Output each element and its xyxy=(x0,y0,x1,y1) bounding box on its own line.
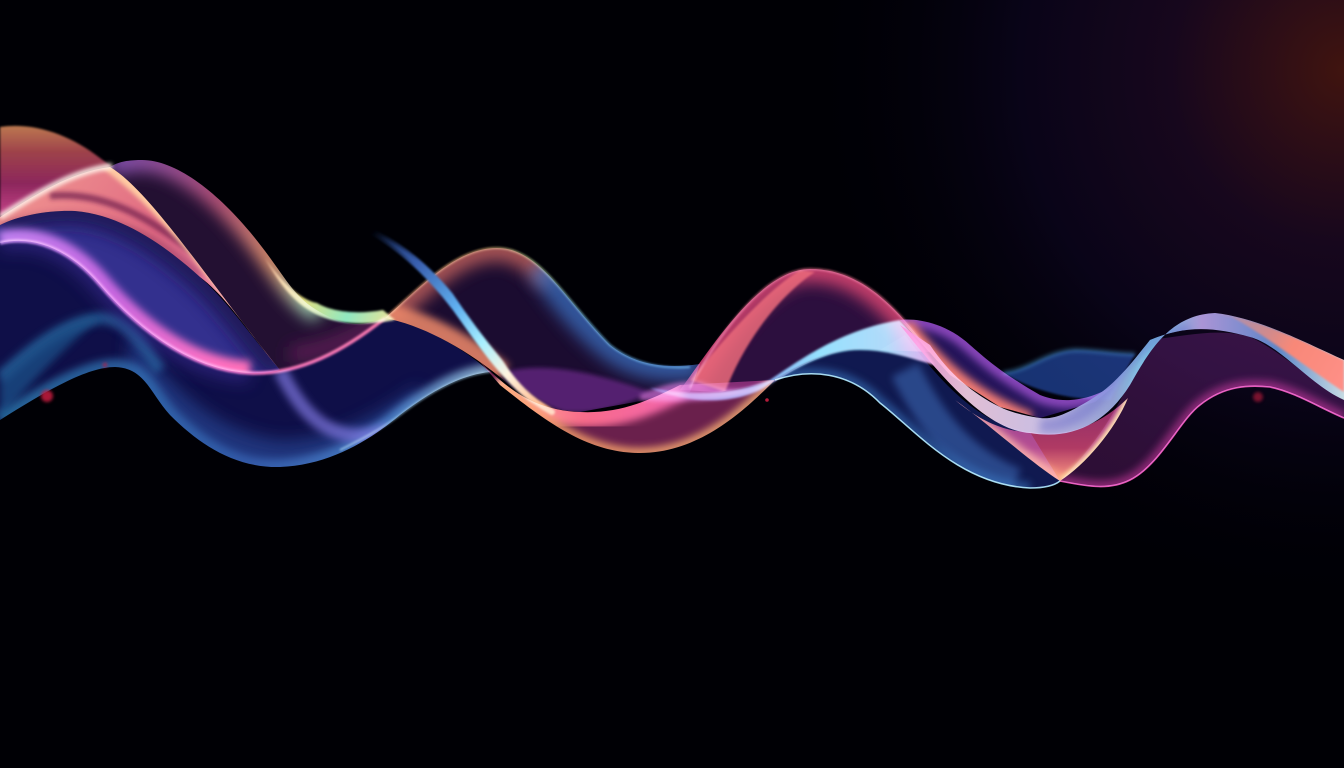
wave: magenta hump xyxy=(680,269,929,392)
wave: right purple hump xyxy=(900,320,1110,418)
abstract wave illustration xyxy=(0,0,1344,489)
wave: pink ribbon xyxy=(0,167,278,368)
wave: crossing lilac band xyxy=(640,380,775,401)
wave: blue lower right edge line xyxy=(775,374,1060,488)
wave: yellow-green fold xyxy=(265,258,395,323)
wave: magenta edge line xyxy=(0,241,385,373)
wave: central silk strand xyxy=(372,232,552,412)
wave: violet ribbon xyxy=(0,210,280,373)
wave: left navy ribbon xyxy=(0,241,490,467)
wave: right silk strand xyxy=(900,313,1344,435)
wave: right magenta edge line xyxy=(1060,386,1344,487)
wave: left plum hump xyxy=(110,160,384,373)
wave: central dark hump xyxy=(385,248,700,412)
wave: cyan strand xyxy=(650,320,935,400)
wave: right magenta ribbon xyxy=(1060,332,1344,486)
wave: central hump edge line xyxy=(385,248,690,367)
wave: top-left warm ribbon xyxy=(0,126,112,217)
wave: left navy ribbon lower edge xyxy=(340,372,490,450)
particle: glowing red dots xyxy=(41,363,1263,402)
wave: central belly ribbon xyxy=(480,362,775,453)
wave: white highlight strand xyxy=(0,166,112,217)
wave: right warm belly xyxy=(956,398,1128,481)
wave: right blue hump xyxy=(1003,350,1135,400)
wave: magenta hump edge line xyxy=(690,269,930,388)
wave: blue lower right ribbon xyxy=(778,349,1060,488)
